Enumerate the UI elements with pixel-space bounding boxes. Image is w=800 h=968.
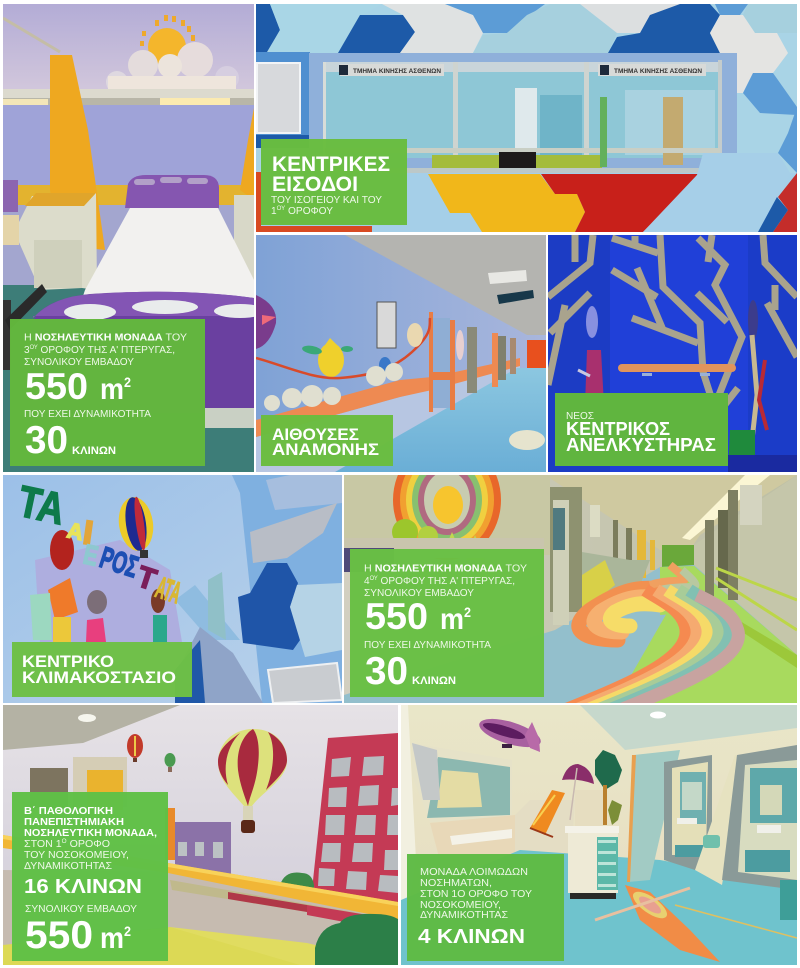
floor [335,368,546,472]
callout: infectious diseases unit: ΣΤΟΝ 1Ο ΟΡΟΦΟ ΤΟΥ [420,888,532,900]
icon: small balloon red [127,734,143,762]
icon: purple blimp [476,713,544,753]
callout: waiting rooms [261,415,393,466]
callout: infectious diseases unit: 4 ΚΛΙΝΩΝ [418,925,525,948]
wall rainbow mural [344,475,550,572]
panel: waiting rooms corridor [256,235,546,472]
clouds on wall [264,363,403,411]
mural lettering: ΑΤΑ [152,571,185,610]
icon: red building [312,733,398,917]
panel: main entrances [256,4,797,232]
hexagon wall pattern [175,503,342,703]
sign: left [339,64,444,76]
panel: central staircase [3,475,342,703]
callout: pathology ward: ΠΑΝΕΠΙΣΤΗΜΙΑΚΗ [24,817,124,828]
trolley [565,790,619,899]
icon: deck chair [530,790,565,837]
panel: infectious diseases unit [401,705,797,965]
callout: ward 4th floor: 2 [464,604,471,620]
handrail [618,364,736,376]
wall segment [695,755,745,885]
right wall [694,475,797,655]
callout: ward 3rd floor: m [100,373,127,406]
lower wall [3,870,398,965]
callout: ward 4th floor: ΚΛΙΝΩΝ [412,675,456,687]
icon: small balloon green [164,753,176,772]
callout: pathology ward: ΟΡΟΦΟ [67,839,110,850]
callout: ward 4th floor: ΣΥΝΟΛΙΚΟΥ ΕΜΒΑΔΟΥ [364,587,474,599]
callout: ward 4th floor: Η ΝΟΣΗΛΕΥΤΙΚΗ ΜΟΝΑΔΑ ΤΟΥ [364,562,527,574]
callout: ward 4th floor [350,549,544,697]
callout: main entrances [261,139,407,225]
icon: beach umbrella [562,764,594,820]
sign: right [598,64,706,76]
callout: ward 4th floor: 30 [365,650,408,693]
callout: central staircase: ΚΕΝΤΡΙΚΟ [22,653,114,671]
callout: central staircase: ΚΛΙΜΑΚΟΣΤΑΣΙΟ [22,669,176,687]
callout: main entrances: ΟΡΟΦΟΥ [285,206,333,217]
icon: sun and clouds mural [106,15,239,93]
callout: waiting rooms: ΑΙΘΟΥΣΕΣ [272,426,359,444]
footboard [30,292,254,413]
wall hills [582,552,650,591]
icon: striped balloon [118,496,154,558]
callout: central elevator: ΚΕΝΤΡΙΚΟΣ [566,419,670,439]
panel: pathology ward corridor [3,705,398,965]
callout: infectious diseases unit [407,854,564,961]
mural lettering [20,484,180,604]
callout: ward 3rd floor: ΟΥ [30,345,38,351]
panel: rainbow corridor, 4th floor [344,475,797,703]
callout: ward 4th floor: 4 [364,575,370,587]
callout: pathology ward: 550 [25,914,93,957]
callout: waiting rooms: ΑΝΑΜΟΝΗΣ [272,441,379,459]
callout: pathology ward: ΤΟΥ ΝΟΣΟΚΟΜΕΙΟΥ, [24,850,129,861]
icon: painted runner left [577,306,604,393]
callout: ward 3rd floor: 550 [25,366,88,407]
icon: kayak floor graphic [595,885,797,962]
callout: infectious diseases unit: ΝΟΣΟΚΟΜΕΙΟΥ, [420,899,501,911]
doors [377,302,516,412]
callout: main entrances: ΚΕΝΤΡΙΚΕΣ [272,153,390,176]
right wall doors and handrail [705,485,797,630]
callout: pathology ward: Β΄ ΠΑΘΟΛΟΓΙΚΗ [24,806,113,817]
callout: pathology ward: Ο [62,839,67,845]
mural lettering: Τ [133,560,160,597]
tree mural [548,235,797,406]
callout: ward 3rd floor: 30 [25,419,68,462]
mural lettering: Ε [81,539,101,572]
callout: ward 3rd floor: 2 [124,374,131,390]
icon: painted runner right [748,300,767,440]
doorway bathroom 2 [722,745,797,920]
callout: pathology ward: ΝΟΣΗΛΕΥΤΙΚΗ ΜΟΝΑΔΑ, [24,828,157,839]
callout: ward 3rd floor: ΣΥΝΟΛΙΚΟΥ ΕΜΒΑΔΟΥ [24,356,134,368]
callout: pathology ward: ΣΤΟΝ 1 [24,839,59,850]
callout: pathology ward [12,792,168,961]
bush foreground [315,914,398,965]
callout: ward 4th floor: ΟΥ [370,576,378,582]
callout: main entrances: ΟΥ [277,206,285,212]
callout: pathology ward: ΣΥΝΟΛΙΚΟΥ ΕΜΒΑΔΟΥ [25,903,137,915]
mural: children painting [30,520,167,642]
callout: ward 3rd floor: ΠΟΥ ΕΧΕΙ ΔΥΝΑΜΙΚΟΤΗΤΑ [24,408,151,420]
mural lettering: ΡΟΣ [96,541,142,584]
ceiling [3,705,180,750]
callout: ward 3rd floor: ΟΡΟΦΟΥ ΤΗΣ Α' ΠΤΕΡΥΓΑΣ, [38,344,175,356]
callout: pathology ward: 2 [124,923,131,939]
callout: ward 4th floor: 550 [365,596,428,637]
bush [280,872,314,900]
door open [627,750,680,882]
hexagon wall pattern [256,4,797,173]
icon: purple building [165,808,231,874]
panel: ward bed, 3rd floor [3,4,266,472]
doorway bathroom 1 [664,755,712,870]
callout: infectious diseases unit: ΝΟΣΗΜΑΤΩΝ, [420,877,492,889]
callout: pathology ward: 16 ΚΛΙΝΩΝ [24,875,142,898]
orange wall band [256,358,520,437]
coloured floor [256,153,797,232]
ceiling [345,235,546,335]
callout: central elevator [555,393,728,466]
ceiling [580,705,797,750]
mirror and sink [412,743,575,880]
sign: right: ΤΜΗΜΑ ΚΙΝΗΣΗΣ ΑΣΘΕΝΩΝ [614,68,702,75]
yellow handrail [3,835,398,920]
nightstand [18,193,97,290]
entrance window [309,53,737,173]
callout: ward 4th floor: m [440,603,467,636]
icon: palm tree [595,750,622,825]
callout: infectious diseases unit: ΜΟΝΑΔΑ ΛΟΙΜΩΔΩΝ [420,866,528,878]
callout: ward 3rd floor: Η ΝΟΣΗΛΕΥΤΙΚΗ ΜΟΝΑΔΑ ΤΟΥ [24,332,187,344]
bed headboard and mattress [125,175,219,208]
callout: pathology ward: ΔΥΝΑΜΙΚΟΤΗΤΑΣ [24,861,112,872]
icon: bird mural [256,295,464,378]
callout: ward 4th floor: ΠΟΥ ΕΧΕΙ ΔΥΝΑΜΙΚΟΤΗΤΑ [364,639,491,651]
callout: central elevator: ΝΕΟΣ [566,411,594,422]
callout: main entrances: ΤΟΥ ΙΣΟΓΕΙΟΥ ΚΑΙ ΤΟΥ [271,195,382,206]
icon: orange curtain [50,55,105,250]
doors left wall [550,487,655,625]
floor rainbow [565,565,738,710]
sign: left: ΤΜΗΜΑ ΚΙΝΗΣΗΣ ΑΣΘΕΝΩΝ [353,68,441,75]
ceiling [545,475,797,550]
callout: infectious diseases unit: ΔΥΝΑΜΙΚΟΤΗΤΑΣ [420,909,509,921]
callout: central elevator: ΑΝΕΛΚΥΣΤΗΡΑΣ [566,435,716,455]
mural lettering: Α [65,517,86,545]
callout: ward 4th floor: ΟΡΟΦΟΥ ΤΗΣ Α' ΠΤΕΡΥΓΑΣ, [378,575,515,587]
callout: ward 3rd floor: 3 [24,344,30,356]
panel: central elevator [548,235,797,472]
icon: large hot air balloon [218,729,287,833]
callout: main entrances: ΕΙΣΟΔΟΙ [272,173,358,196]
floor [401,850,797,965]
callout: main entrances: 1 [271,206,277,217]
callout: ward 3rd floor: ΚΛΙΝΩΝ [72,445,116,457]
callout: pathology ward: m [100,922,127,955]
lower wall [256,366,520,472]
floor [344,565,797,703]
callout: central staircase [12,642,192,697]
far wall [662,545,694,569]
mural lettering: ΤΑ [14,477,69,534]
callout: ward 3rd floor [10,319,205,466]
doorway [30,757,127,810]
